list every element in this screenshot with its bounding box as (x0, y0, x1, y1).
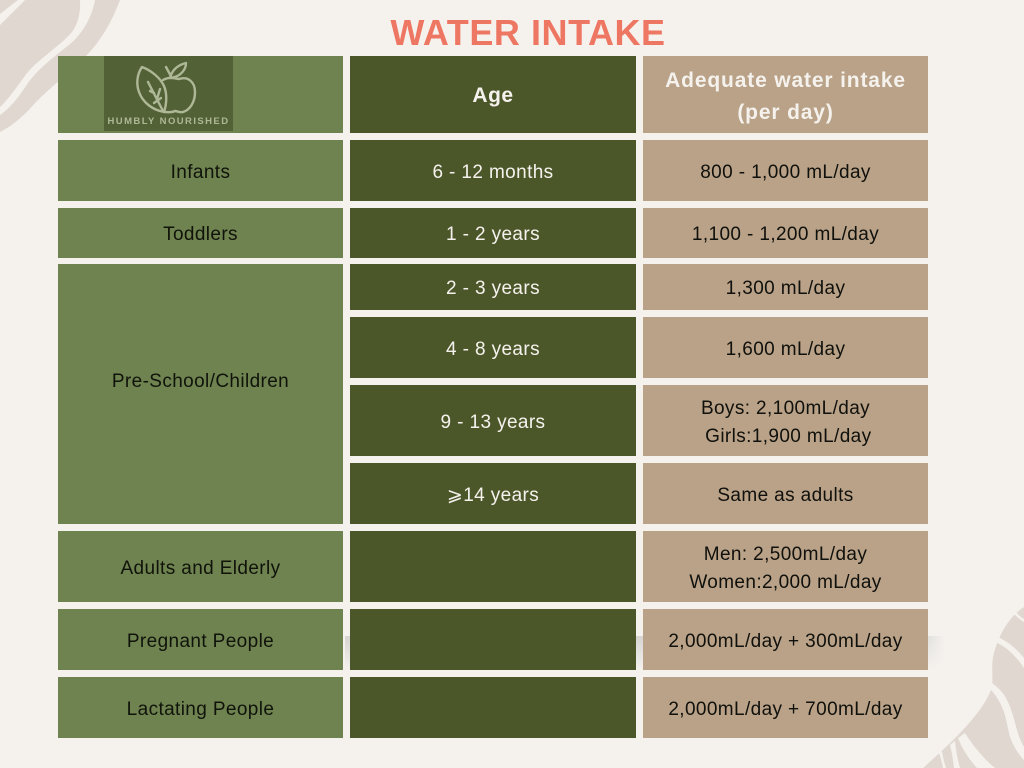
header: adequate water intake: Adequate water intake (665, 69, 906, 92)
row: adults age (empty) (350, 531, 636, 602)
row: toddlers intake: 1,100 - 1,200 mL/day (692, 224, 879, 245)
row: pre-school/children group: Pre-School/Children (112, 371, 289, 392)
title: WATER INTAKE (390, 12, 666, 53)
row: lactating group (58, 677, 343, 738)
soft shadow behind table (345, 636, 945, 670)
row: adults intake: Men: 2,500mL/day (704, 544, 867, 564)
header: adequate water intake (643, 56, 928, 133)
row: pregnant intake (643, 609, 928, 670)
row: adults intake (643, 531, 928, 602)
row: infants age (350, 140, 636, 201)
row: pregnant group: Pregnant People (127, 630, 274, 652)
row: 9-13 years intake (643, 385, 928, 456)
row: lactating group: Lactating People (127, 698, 274, 720)
decoration: bottom-right leaf (923, 607, 1024, 768)
row: toddlers age (350, 208, 636, 258)
row: toddlers group: Toddlers (163, 224, 238, 245)
row: 9-13 years intake: Boys: 2,100mL/day (701, 398, 870, 418)
decoration: top-left leaf (0, 0, 120, 132)
header: logo cell (58, 56, 343, 133)
row: 2-3 years intake: 1,300 mL/day (726, 278, 845, 299)
row: adults group: Adults and Elderly (120, 558, 280, 578)
row: 4-8 years intake: 1,600 mL/day (726, 338, 845, 360)
row: infants group: Infants (171, 162, 230, 182)
header: age: Age (472, 84, 514, 107)
row: lactating intake: 2,000mL/day + 700mL/day (668, 698, 903, 720)
row: infants age: 6 - 12 months (432, 162, 554, 182)
row: 2-3 years age: 2 - 3 years (446, 278, 540, 299)
row: pregnant group (58, 609, 343, 670)
row: toddlers group (58, 208, 343, 258)
row: 14+ years age: ⩾14 years (447, 484, 539, 506)
row: adults intake: Women:2,000 mL/day (689, 572, 882, 592)
row: pre-school/children group (58, 264, 343, 524)
row: infants intake (643, 140, 928, 201)
row: 2-3 years age (350, 264, 636, 310)
row: 4-8 years age: 4 - 8 years (446, 338, 540, 360)
row: infants intake: 800 - 1,000 mL/day (700, 162, 871, 182)
row: pregnant age (empty) (350, 609, 636, 670)
row: 4-8 years age (350, 317, 636, 378)
row: lactating age (empty) (350, 677, 636, 738)
row: 2-3 years intake (643, 264, 928, 310)
row: infants group (58, 140, 343, 201)
header: age (350, 56, 636, 133)
row: toddlers intake (643, 208, 928, 258)
row: 14+ years intake (643, 463, 928, 524)
row: 9-13 years age (350, 385, 636, 456)
header: adequate water intake: (per day) (737, 101, 834, 124)
logo: Humbly Nourished: HUMBLY NOURISHED (108, 116, 229, 127)
row: 4-8 years intake (643, 317, 928, 378)
row: 9-13 years intake: Girls:1,900 mL/day (705, 426, 871, 446)
row: pregnant intake: 2,000mL/day + 300mL/day (668, 630, 903, 652)
logo: Humbly Nourished (104, 56, 233, 131)
icon: apple and leaf (136, 62, 196, 114)
row: lactating intake (643, 677, 928, 738)
row: 9-13 years age: 9 - 13 years (441, 412, 545, 432)
shadow fade on right edge (928, 636, 945, 670)
row: adults group (58, 531, 343, 602)
row: toddlers age: 1 - 2 years (446, 224, 540, 245)
row: 14+ years intake: Same as adults (717, 484, 854, 506)
row: 14+ years age (350, 463, 636, 524)
